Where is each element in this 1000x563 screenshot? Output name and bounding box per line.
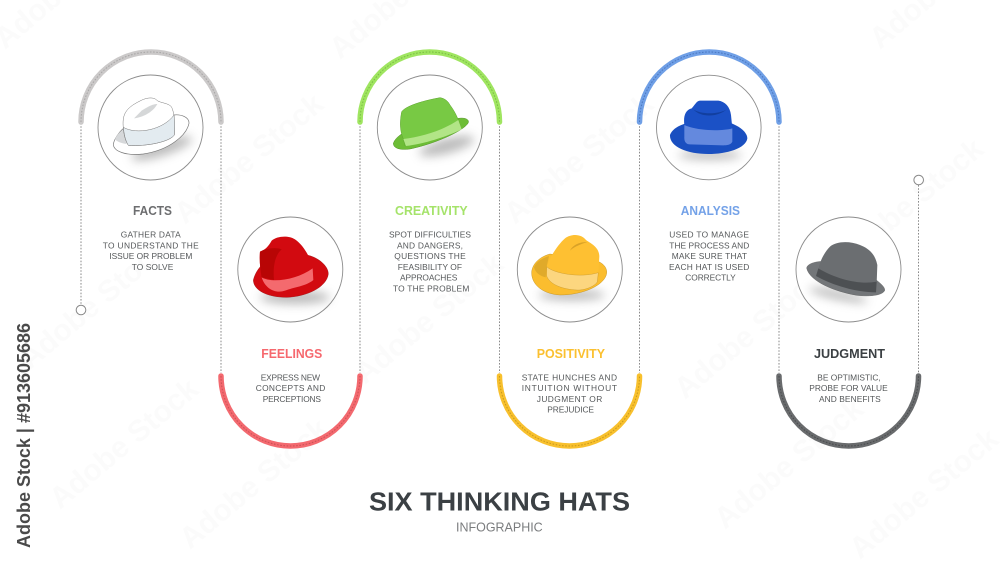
text: Adobe Stock: [13, 232, 175, 375]
text: Adobe Stock: [348, 247, 510, 390]
text block: judgment: BE OPTIMISTIC,: [817, 372, 881, 382]
text block: positivity: INTUITION WITHOUT: [522, 383, 617, 393]
icon: red hat: [238, 217, 343, 322]
text block: positivity: [522, 346, 617, 415]
text block: feelings: PERCEPTIONS: [263, 394, 321, 404]
text block: positivity: POSITIVITY: [537, 346, 605, 361]
text block: creativity: AND DANGERS,: [397, 240, 463, 250]
arc: analysis: [640, 52, 779, 122]
text block: creativity: SPOT DIFFICULTIES: [389, 230, 471, 240]
title: SIX THINKING HATS: [369, 487, 630, 517]
stock id side label: Adobe Stock | #913605686: [13, 323, 34, 548]
text: Adobe Stock: [168, 87, 330, 230]
text block: facts: TO UNDERSTAND THE: [103, 240, 199, 250]
text block: facts: FACTS: [133, 203, 172, 218]
icon: green hat: [377, 75, 482, 180]
text block: creativity: APPROACHES: [400, 272, 458, 282]
text block: analysis: THE PROCESS AND: [669, 240, 749, 250]
text block: analysis: CORRECTLY: [685, 272, 736, 282]
text block: judgment: JUDGMENT: [814, 346, 885, 361]
text block: facts: [103, 203, 199, 272]
text: Adobe Stock: [708, 392, 870, 535]
text block: facts: ISSUE OR PROBLEM: [109, 251, 192, 261]
arc: facts: [81, 52, 221, 122]
text block: analysis: [669, 203, 749, 282]
text block: analysis: USED TO MANAGE: [669, 230, 749, 240]
text block: feelings: FEELINGS: [261, 346, 323, 361]
text block: facts: TO SOLVE: [132, 262, 174, 272]
text: Adobe Stock: [498, 87, 660, 230]
text: Adobe Stock: [173, 412, 335, 555]
text block: feelings: EXPRESS NEW: [261, 372, 320, 382]
text block: analysis: MAKE SURE THAT: [672, 251, 747, 261]
text block: facts: GATHER DATA: [121, 230, 181, 240]
text block: positivity: PREJUDICE: [547, 405, 594, 415]
text block: creativity: TO THE PROBLEM: [393, 283, 469, 293]
text block: creativity: QUESTIONS THE: [394, 251, 466, 261]
text block: analysis: ANALYSIS: [681, 203, 740, 218]
icon: yellow hat: [517, 217, 622, 322]
text block: feelings: [256, 346, 325, 404]
text: Adobe Stock: [43, 372, 205, 515]
arc: positivity: [500, 376, 640, 446]
text block: analysis: EACH HAT IS USED: [669, 262, 749, 272]
icon: blue hat: [656, 75, 761, 180]
subtitle: INFOGRAPHIC: [456, 520, 543, 535]
arc: feelings: [221, 376, 360, 446]
text block: positivity: JUDGMENT OR: [537, 394, 602, 404]
text block: creativity: FEASIBILITY OF: [398, 262, 462, 272]
text block: creativity: CREATIVITY: [395, 203, 468, 218]
arc: creativity: [360, 52, 500, 122]
text block: feelings: CONCEPTS AND: [256, 383, 325, 393]
text: Adobe Stock: [828, 132, 990, 275]
icon: white hat: [98, 75, 203, 180]
text block: creativity: [389, 203, 471, 293]
connector: start node and dotted lines: [76, 123, 923, 373]
text block: judgment: AND BENEFITS: [819, 394, 881, 404]
text block: judgment: [809, 346, 888, 404]
arc: judgment: [779, 376, 918, 446]
text: Adobe Stock: [668, 262, 830, 405]
text block: judgment: PROBE FOR VALUE: [809, 383, 888, 393]
icon: grey hat: [796, 217, 901, 322]
text block: positivity: STATE HUNCHES AND: [522, 372, 617, 382]
